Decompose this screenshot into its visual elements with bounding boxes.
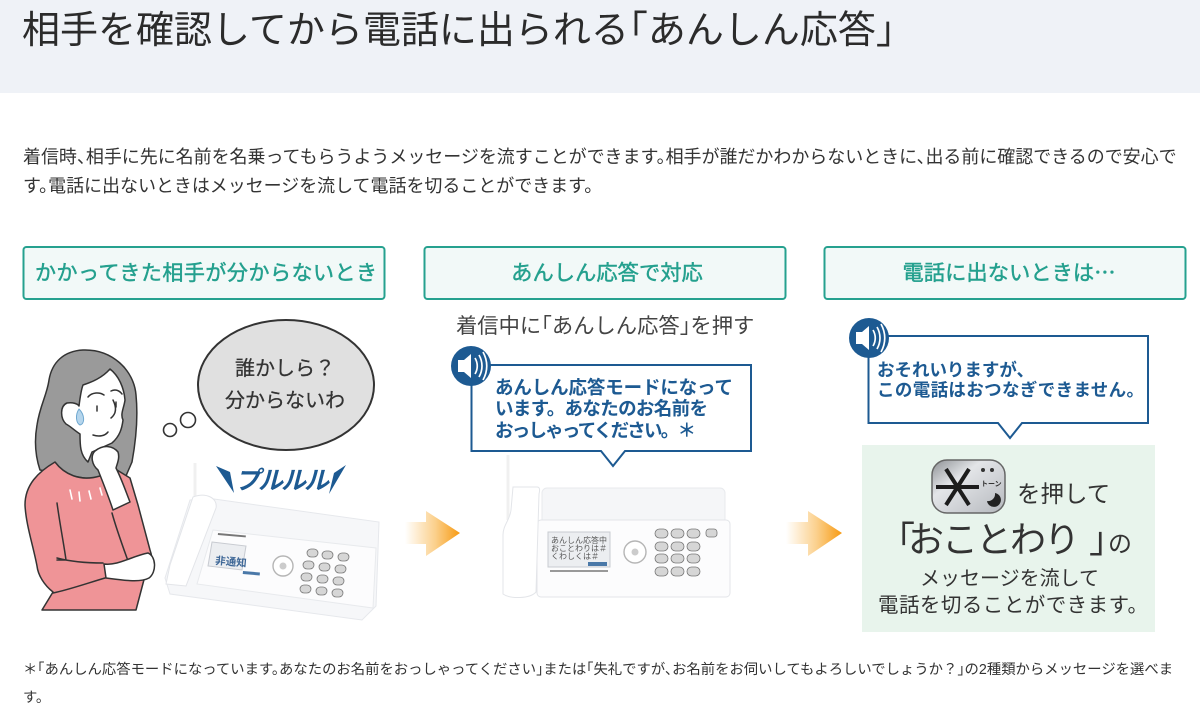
icon: speaker 2 bbox=[451, 346, 491, 386]
intro text: す。電話に出ないときはメッセージを流して電話を切ることができます。 bbox=[23, 176, 602, 196]
fax phone 2: あんしん応答中 bbox=[551, 535, 607, 545]
panel: decline instructions: の bbox=[1108, 531, 1132, 558]
panel: decline instructions: 「 bbox=[879, 519, 915, 560]
panel: decline instructions: 」 bbox=[1089, 519, 1125, 560]
speech bubble 3: この電話はおつなぎできません。 bbox=[877, 380, 1144, 400]
icon: speaker 3 bbox=[849, 318, 889, 358]
intro text bbox=[23, 147, 1177, 196]
step header 1 bbox=[24, 247, 384, 299]
panel: decline instructions: 電話を切ることができます。 bbox=[878, 594, 1148, 617]
fax phone 1 bbox=[165, 463, 379, 620]
step header 1: かかってきた相手が分からないとき bbox=[35, 262, 377, 285]
panel: decline instructions: を押して bbox=[1017, 481, 1110, 507]
step header 2 bbox=[424, 247, 786, 299]
panel: decline instructions: メッセージを流して bbox=[920, 567, 1099, 590]
illustration: worried woman bbox=[25, 350, 155, 610]
footnote: ＊「あんしん応答モードになっています。あなたのお名前をおっしゃってください」または「失礼ですが、お名前をお伺いしてもよろしいでしょうか？」の2種類からメッセージを選べま bbox=[23, 662, 1173, 678]
fax phone 2: くわしくは＃ bbox=[551, 552, 599, 561]
speech bubble 3: おそれいりますが、 bbox=[877, 360, 1034, 380]
icon: star key bbox=[932, 460, 1005, 513]
footnote bbox=[23, 662, 1173, 706]
header band bbox=[0, 0, 1200, 93]
speech bubble 2: あんしん応答モードになって bbox=[495, 377, 733, 398]
arrow 1 bbox=[405, 511, 460, 556]
ringing label bbox=[216, 465, 346, 495]
arrow 2 bbox=[786, 511, 842, 556]
speech bubble 2: います。あなたのお名前を bbox=[495, 398, 708, 419]
speech bubble 3 bbox=[868, 336, 1148, 438]
step 2 caption: 着信中に「あんしん応答」を押す bbox=[456, 314, 754, 338]
ringing label: プルルル bbox=[235, 467, 330, 495]
title: 相手を確認してから電話に出られる「あんしん応答」 bbox=[22, 10, 914, 52]
fax phone 2: おことわりは＃ bbox=[551, 544, 607, 553]
panel: decline instructions: おことわり bbox=[908, 519, 1080, 560]
step header 2: あんしん応答で対応 bbox=[511, 261, 703, 285]
step header 3 bbox=[824, 247, 1186, 299]
fax phone 1: 非通知 bbox=[215, 554, 247, 570]
speech bubble 2: おっしゃってください。＊ bbox=[495, 420, 696, 441]
intro text: 着信時、相手に先に名前を名乗ってもらうようメッセージを流すことができます。相手が誰だかわからないときに、出る前に確認できるので安心で bbox=[23, 147, 1177, 167]
thought bubble bbox=[164, 320, 374, 450]
step header 3: 電話に出ないときは… bbox=[902, 256, 1116, 287]
icon: star key: トーン bbox=[981, 481, 1002, 488]
thought bubble: 誰かしら？ bbox=[235, 357, 335, 380]
thought bubble: 分からないわ bbox=[225, 389, 345, 412]
footnote: す。 bbox=[23, 690, 50, 706]
panel: decline instructions bbox=[862, 445, 1155, 632]
fax phone 2 bbox=[503, 455, 730, 598]
speech bubble 2 bbox=[472, 365, 751, 466]
